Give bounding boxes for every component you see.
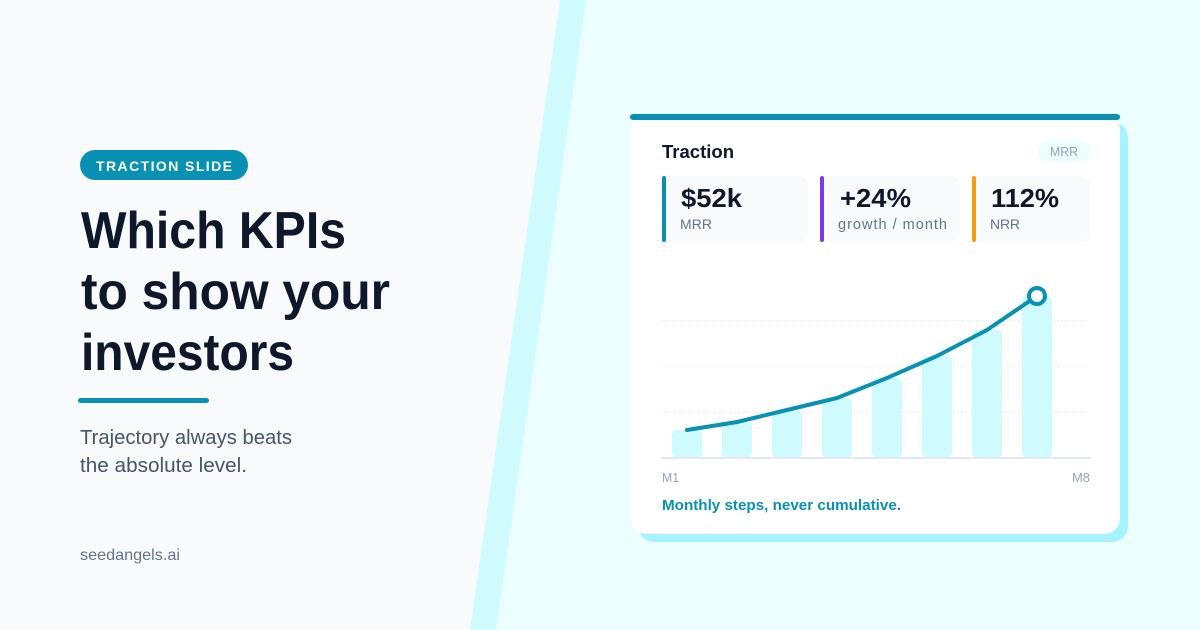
badge: traction slide — [80, 150, 248, 180]
panel: traction card — [630, 114, 1120, 534]
KPI: growth: +24% — [840, 183, 911, 213]
subtitle — [80, 427, 292, 477]
tag: MRR — [1038, 140, 1090, 162]
subtitle: Trajectory always beats — [80, 427, 292, 449]
chart — [662, 288, 1090, 485]
KPI: growth: growth / month — [838, 217, 947, 233]
card top bar — [630, 114, 1120, 120]
card heading: Traction — [662, 142, 734, 162]
title — [81, 202, 390, 382]
subtitle: the absolute level. — [80, 455, 247, 477]
title: to show your — [81, 263, 390, 321]
title underline — [78, 398, 209, 403]
diagonal stripe — [470, 0, 586, 630]
KPI: MRR: $52k — [681, 183, 743, 213]
end marker — [1029, 288, 1045, 304]
title: investors — [81, 324, 294, 382]
KPI: MRR: MRR — [680, 216, 712, 232]
KPI: growth — [820, 176, 960, 242]
KPI: MRR — [662, 176, 808, 242]
chart caption: Monthly steps, never cumulative. — [662, 497, 901, 514]
KPI: NRR: NRR — [990, 216, 1020, 232]
trend line — [687, 296, 1037, 430]
title: Which KPIs — [81, 202, 346, 260]
axis label: M1: M1 — [662, 470, 679, 485]
axis label: M8: M8 — [1072, 470, 1090, 485]
footer brand: seedangels.ai — [80, 547, 180, 564]
card shadow — [638, 122, 1128, 542]
KPI: NRR — [972, 176, 1090, 242]
tag: MRR: MRR — [1050, 144, 1078, 159]
axis baseline — [662, 457, 1090, 459]
bars — [672, 296, 1052, 458]
left panel background — [0, 0, 560, 630]
KPI: NRR: 112% — [991, 183, 1059, 213]
badge: traction slide: TRACTION SLIDE — [96, 158, 232, 174]
